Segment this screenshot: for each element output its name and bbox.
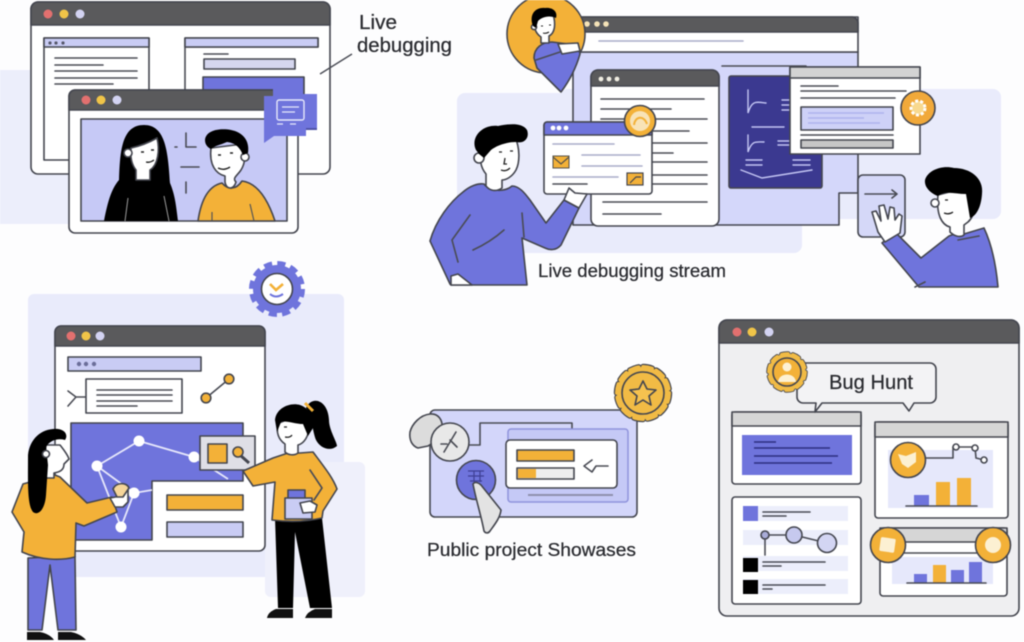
label: live debugging stream: Live debugging stream [538,260,726,281]
dark code panel [729,76,822,188]
browser frame [719,320,1019,616]
card with magnifier [200,436,255,470]
card: list with node connections [732,497,861,604]
avatar pin with person [507,0,585,92]
icon: orange gear badge [901,91,935,125]
document panel [591,70,719,226]
person: man presenting on the left [430,124,587,285]
panel: live debugging video call [0,2,452,233]
front video call window [69,90,298,233]
panel: collaboration dashboard with two women [12,264,365,640]
panel: bug hunt dashboard [719,320,1019,616]
floating report window [790,67,920,154]
card: bar chart with bird badge [875,422,1008,518]
label: public project showases: Public project Showases [427,539,636,560]
person: woman with long hair, orange sweater [12,429,129,640]
icon: gold star medal [617,367,669,419]
label: live debugging: debugging [357,35,452,57]
panel: public project showcases [410,367,669,560]
icon: cart button and pointer [456,460,501,533]
icon: blue gear [252,264,302,314]
network graph [71,423,243,540]
chat bubble icon [264,88,317,143]
orange and lavender bars [167,495,243,537]
icon: overlapping tool blobs [410,414,469,461]
person: man waving on the right [872,167,998,287]
showcase card [430,410,637,517]
person: man in orange sweater [198,129,275,221]
phone with arrow [858,175,905,237]
back browser window [31,2,330,174]
main browser window [573,17,858,225]
card: blue text block [732,412,861,484]
panel: live debugging stream [430,0,1001,287]
icon: user medal [768,354,806,390]
person: woman with long black hair [104,125,178,221]
label: live debugging [320,12,452,74]
bug hunt speech bubble: Bug Hunt [829,371,913,394]
card: bars with two badges [870,528,1010,596]
small mail window [544,122,652,194]
person: woman with ponytail, orange sweater [243,401,337,618]
label: live debugging: Live [359,12,397,34]
bug hunt speech bubble [797,363,936,412]
icon: orange badge [624,106,656,136]
dashboard browser window [55,326,265,551]
